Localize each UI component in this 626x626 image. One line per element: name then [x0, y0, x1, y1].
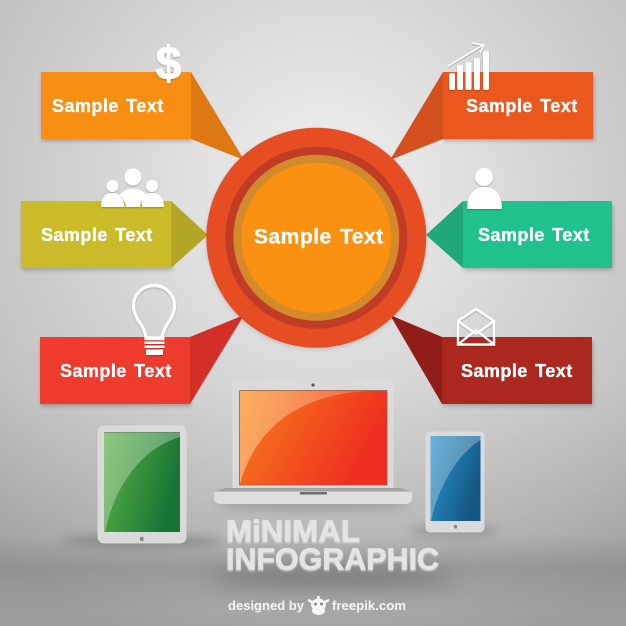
panel: bottom-right dark red label: [390, 315, 593, 406]
lower background shade: [0, 380, 626, 626]
icon: light bulb: [134, 286, 174, 355]
credit text right: freepik.com: [332, 598, 406, 613]
panel: top-left orange label: [41, 72, 244, 160]
icon: envelope: [458, 309, 494, 344]
icon: people: [101, 168, 164, 207]
phone device: [408, 432, 500, 536]
icon: dollar: $: [156, 37, 181, 89]
home icon: [454, 525, 457, 528]
label text: Sample Text: [478, 225, 590, 245]
icon: person: [467, 168, 502, 209]
title: [207, 514, 457, 586]
panel: bottom-left red label: [40, 315, 244, 406]
footer credit: [228, 596, 406, 615]
tablet device: [62, 426, 222, 547]
laptop device: [214, 382, 412, 510]
panel: top-right orange-red label: [390, 72, 594, 160]
panel: middle-left olive label: [21, 201, 208, 270]
home icon: [140, 537, 144, 541]
title line 2: INFOGRAPHIC: [226, 542, 439, 576]
credit text left: designed by: [228, 598, 305, 613]
label text: Sample Text: [41, 225, 153, 245]
floor shadow band: [0, 535, 626, 612]
panel: middle-right green label: [426, 201, 613, 270]
central circle: [206, 128, 426, 349]
label text: Sample Text: [466, 96, 578, 116]
label text: Sample Text: [60, 361, 172, 381]
icon: freepik mascot: [308, 596, 329, 615]
center text: Sample Text: [254, 226, 384, 248]
label text: Sample Text: [461, 361, 573, 381]
label text: Sample Text: [52, 96, 164, 116]
icon: bar chart with arrow: [448, 43, 489, 90]
title line 1: MiNIMAL: [226, 514, 360, 548]
